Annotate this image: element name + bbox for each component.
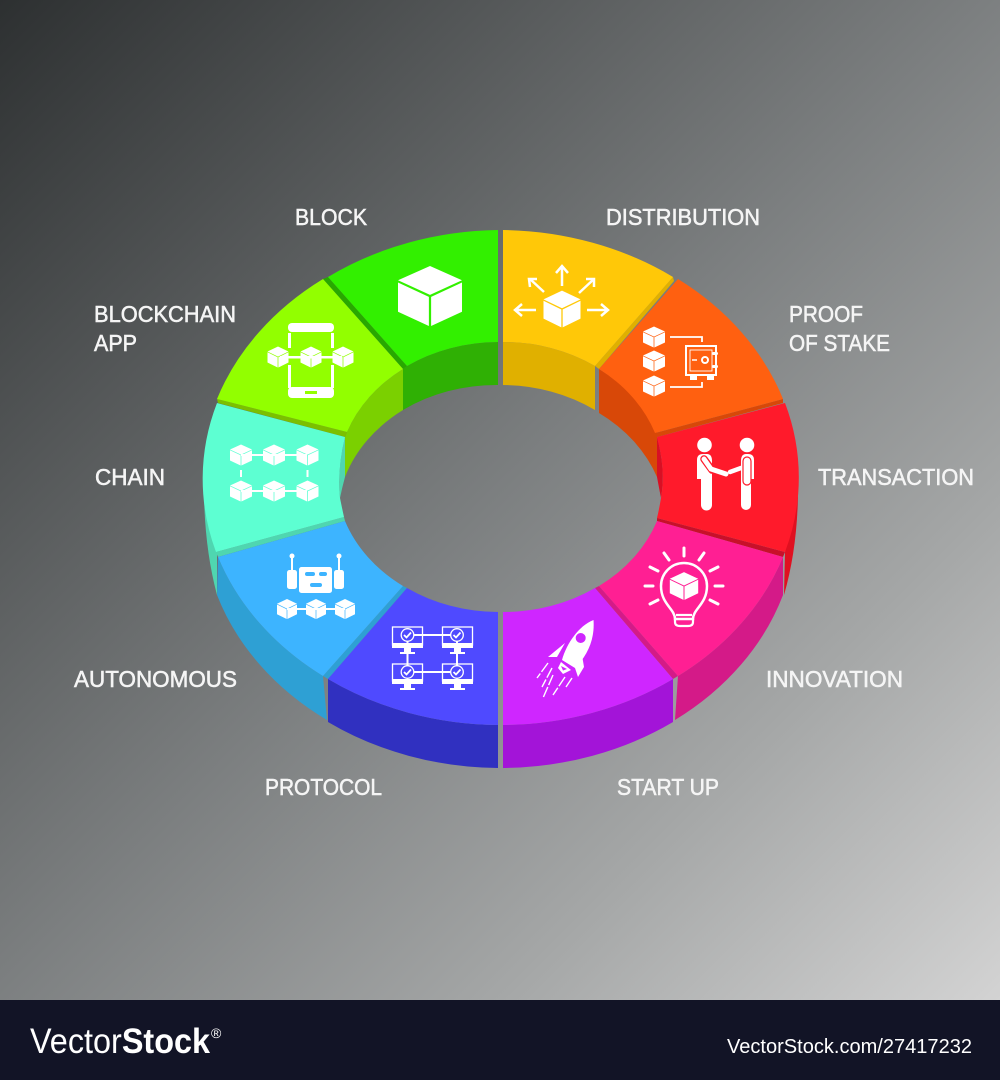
- segment: blockchain app: [217, 279, 403, 432]
- label: autonomous: AUTONOMOUS: [74, 666, 237, 692]
- icon: distribution arrows: [515, 266, 608, 327]
- icon: cube: [398, 266, 462, 326]
- segment: chain: [203, 403, 345, 552]
- label: protocol: PROTOCOL: [265, 774, 382, 800]
- segment strips: [216, 277, 785, 679]
- label: chain: CHAIN: [95, 464, 165, 490]
- label: innovation: INNOVATION: [766, 666, 903, 692]
- label: blockchain app: [94, 301, 236, 356]
- icon: handshake: [697, 438, 754, 510]
- registered mark: ®: [211, 1025, 222, 1041]
- segment: transaction: [657, 403, 799, 552]
- icon: blockchain phone: [268, 323, 354, 398]
- icon: robot with cubes: [277, 554, 355, 619]
- label: transaction: TRANSACTION: [818, 464, 974, 490]
- label: proof of stake: [789, 301, 890, 356]
- footer logo: VectorStock: [30, 1022, 210, 1061]
- label: blockchain app: BLOCKCHAIN: [94, 301, 236, 327]
- segment: autonomous: [218, 521, 403, 676]
- label: distribution: DISTRIBUTION: [606, 204, 760, 230]
- label: proof of stake: OF STAKE: [789, 330, 890, 356]
- labels: [74, 204, 974, 800]
- icon: light bulb with cube: [645, 548, 723, 626]
- side walls: [204, 342, 798, 768]
- segment: innovation: [599, 521, 783, 676]
- label: proof of stake: PROOF: [789, 301, 863, 327]
- segment: start up: [503, 588, 673, 725]
- label: start up: START UP: [617, 774, 719, 800]
- segment: block: [328, 230, 498, 366]
- icon: chain of cubes: [230, 444, 318, 502]
- label: blockchain app: APP: [94, 330, 137, 356]
- segment: distribution: [503, 230, 673, 366]
- segment: proof of stake: [599, 279, 783, 433]
- footer url: VectorStock.com/27417232: [727, 1036, 972, 1058]
- footer bar: [0, 1000, 1000, 1080]
- ring chart: [203, 230, 799, 768]
- segment: protocol: [328, 588, 498, 725]
- icon: protocol computers: [392, 627, 473, 690]
- icon: proof of stake safe: [643, 326, 718, 396]
- label: block: BLOCK: [295, 204, 368, 230]
- icon: rocket: [537, 620, 594, 698]
